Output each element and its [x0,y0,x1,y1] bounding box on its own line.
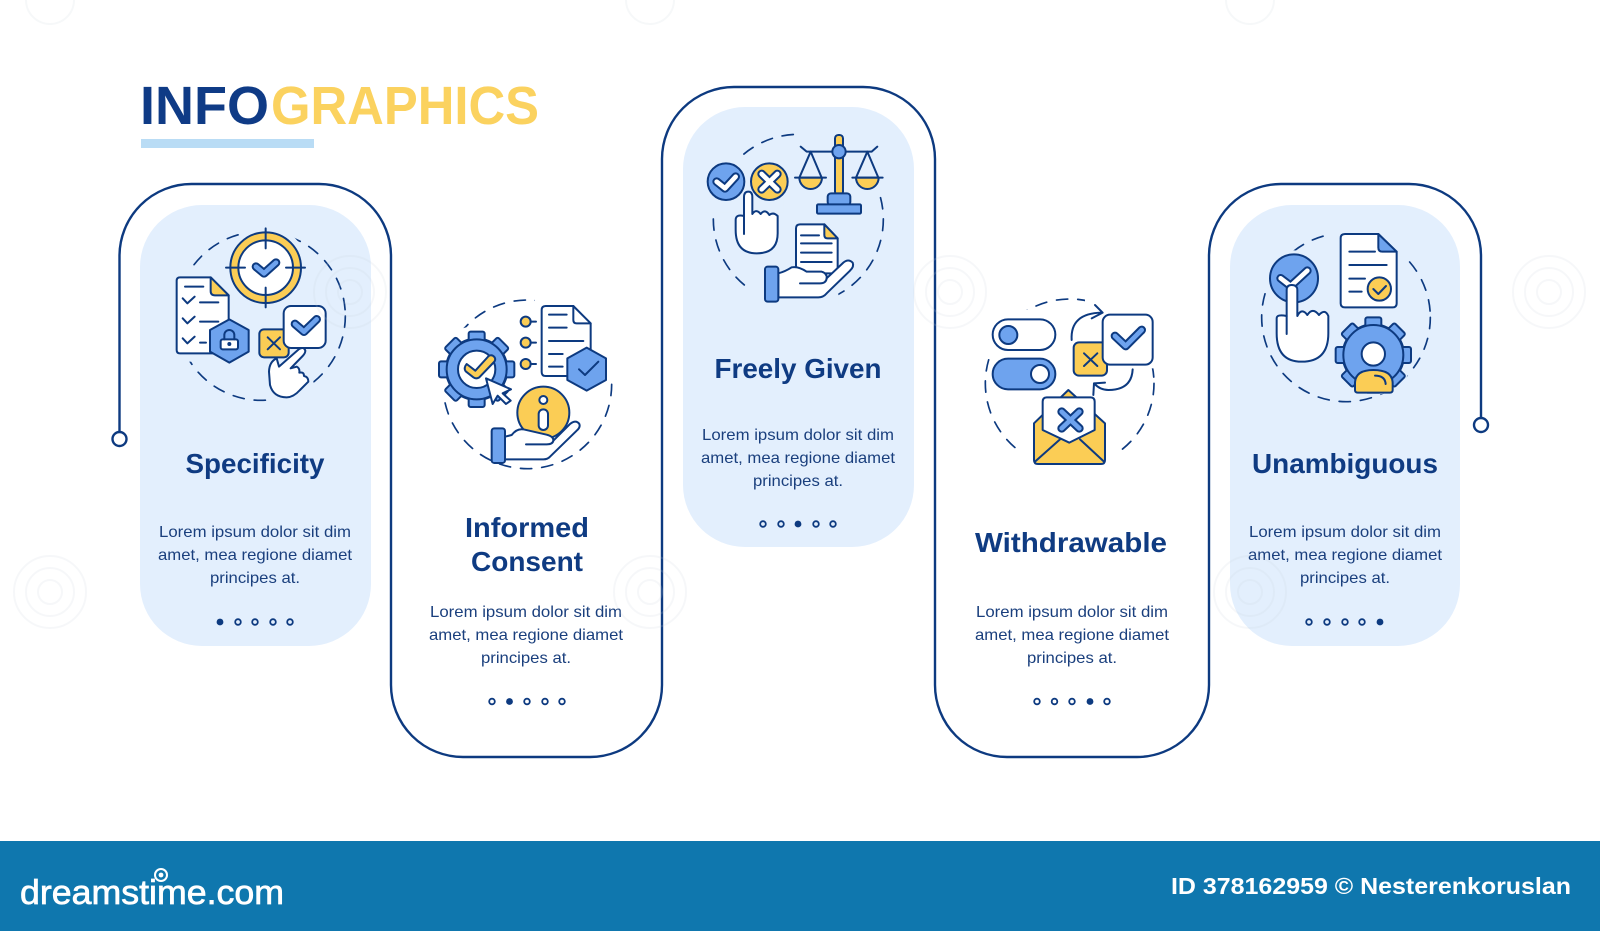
title: INFO [140,76,269,136]
heading: Freely Given [714,353,882,384]
icon: gear, document and info hand [433,295,615,469]
body text: amet, mea regione diamet [158,547,353,564]
heading: Unambiguous [1252,448,1438,479]
heading: Informed [465,512,589,543]
body text: amet, mea regione diamet [429,627,624,644]
body text: amet, mea regione diamet [975,627,1170,644]
panel: withdrawable [975,290,1170,705]
body text: principes at. [481,650,571,667]
panel: informed consent [429,295,624,705]
body text [429,604,624,667]
body text: principes at. [753,473,843,490]
body text: Lorem ipsum dolor sit dim [430,604,622,621]
pagination dots [1306,619,1383,625]
title [140,76,539,136]
body text [1248,524,1443,587]
icon: toggles and envelope [978,290,1163,473]
footer image id and credit: ID 378162959 © Nesterenkoruslan [1171,873,1571,899]
pagination dots [760,521,836,527]
pagination dots [1034,698,1110,705]
body text: principes at. [210,570,300,587]
pagination dots [489,698,565,705]
panel: unambiguous [1230,205,1460,646]
outline end dot [1474,418,1488,432]
icon: target and checklist [170,226,345,407]
body text [158,524,353,587]
heading [465,512,589,577]
body text: Lorem ipsum dolor sit dim [702,427,894,444]
panel: specificity [140,205,371,646]
connecting outline [120,87,1481,757]
panel: freely given [683,107,914,547]
heading: Withdrawable [975,527,1167,558]
body text [975,604,1170,667]
outline start dot [112,432,126,446]
body text: Lorem ipsum dolor sit dim [976,604,1168,621]
footer band [0,841,1600,931]
body text: amet, mea regione diamet [701,450,896,467]
body text: principes at. [1027,650,1117,667]
body text [701,427,896,490]
body text: principes at. [1300,570,1390,587]
heading: Consent [471,546,583,577]
body text: Lorem ipsum dolor sit dim [159,524,351,541]
icon: hand, document and user gear [1262,225,1430,402]
title underline [141,139,314,148]
title: GRAPHICS [271,76,539,136]
heading: Specificity [186,448,325,479]
watermark spirals [14,0,1585,628]
icon: scales and document hand [703,127,884,307]
body text: amet, mea regione diamet [1248,547,1443,564]
body text: Lorem ipsum dolor sit dim [1249,524,1441,541]
footer logo: dreamstime.com [20,874,284,912]
pagination dots [217,619,293,625]
